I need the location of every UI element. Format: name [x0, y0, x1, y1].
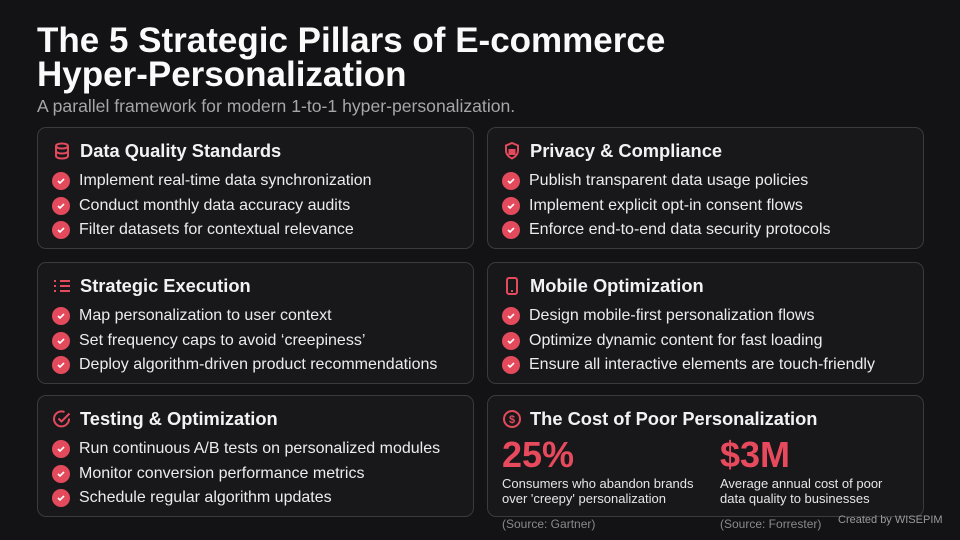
bullets	[52, 172, 372, 239]
bullets: Ensure all interactive elements are touch-friendly	[529, 356, 875, 373]
stat desc: Consumers who abandon brands	[502, 476, 694, 491]
bullets: Implement real-time data synchronization	[79, 172, 372, 189]
heading: Strategic Execution	[80, 275, 251, 296]
stat desc	[720, 476, 882, 506]
panel: testing	[37, 395, 474, 517]
bullets: Publish transparent data usage policies	[529, 172, 808, 189]
source: (Source: Gartner)	[502, 517, 595, 531]
bullets: Deploy algorithm-driven product recommendations	[79, 356, 437, 373]
title: Hyper-Personalization	[37, 55, 407, 94]
panel: cost	[487, 395, 924, 517]
panel: strategic execution	[37, 262, 474, 384]
bullets: Design mobile-first personalization flows	[529, 307, 814, 324]
bullets: Optimize dynamic content for fast loading	[529, 332, 822, 349]
heading: Mobile Optimization	[530, 275, 704, 296]
heading: Privacy & Compliance	[530, 140, 722, 161]
panel: data quality	[37, 127, 474, 249]
stat $3M: $3M	[720, 434, 790, 475]
bullets: Map personalization to user context	[79, 307, 332, 324]
bullets	[502, 172, 830, 239]
subtitle: A parallel framework for modern 1-to-1 hyper-personalization.	[37, 96, 515, 116]
credit: Created by WISEPIM	[838, 514, 943, 526]
bullets	[52, 440, 440, 507]
stat 25%: 25%	[502, 434, 574, 475]
panel: privacy	[487, 127, 924, 249]
heading: The Cost of Poor Personalization	[530, 408, 817, 429]
bullets: Set frequency caps to avoid ‘creepiness’	[79, 332, 365, 349]
title	[37, 21, 665, 94]
heading: Testing & Optimization	[80, 408, 278, 429]
bullets: Filter datasets for contextual relevance	[79, 221, 354, 238]
heading: $	[509, 414, 515, 426]
stat desc: data quality to businesses	[720, 491, 870, 506]
bullets	[502, 307, 875, 374]
panel: mobile	[487, 262, 924, 384]
stat desc: Average annual cost of poor	[720, 476, 882, 491]
bullets: Enforce end-to-end data security protocols	[529, 221, 830, 238]
source: (Source: Forrester)	[720, 517, 821, 531]
bullets: Conduct monthly data accuracy audits	[79, 197, 350, 214]
title: The 5 Strategic Pillars of E-commerce	[37, 21, 665, 60]
bullets: Implement explicit opt-in consent flows	[529, 197, 803, 214]
stat desc: over 'creepy' personalization	[502, 491, 666, 506]
heading: Data Quality Standards	[80, 140, 281, 161]
bullets	[52, 307, 437, 374]
stat desc	[502, 476, 694, 506]
bullets: Monitor conversion performance metrics	[79, 465, 364, 482]
bullets: Schedule regular algorithm updates	[79, 489, 332, 506]
bullets: Run continuous A/B tests on personalized modules	[79, 440, 440, 457]
